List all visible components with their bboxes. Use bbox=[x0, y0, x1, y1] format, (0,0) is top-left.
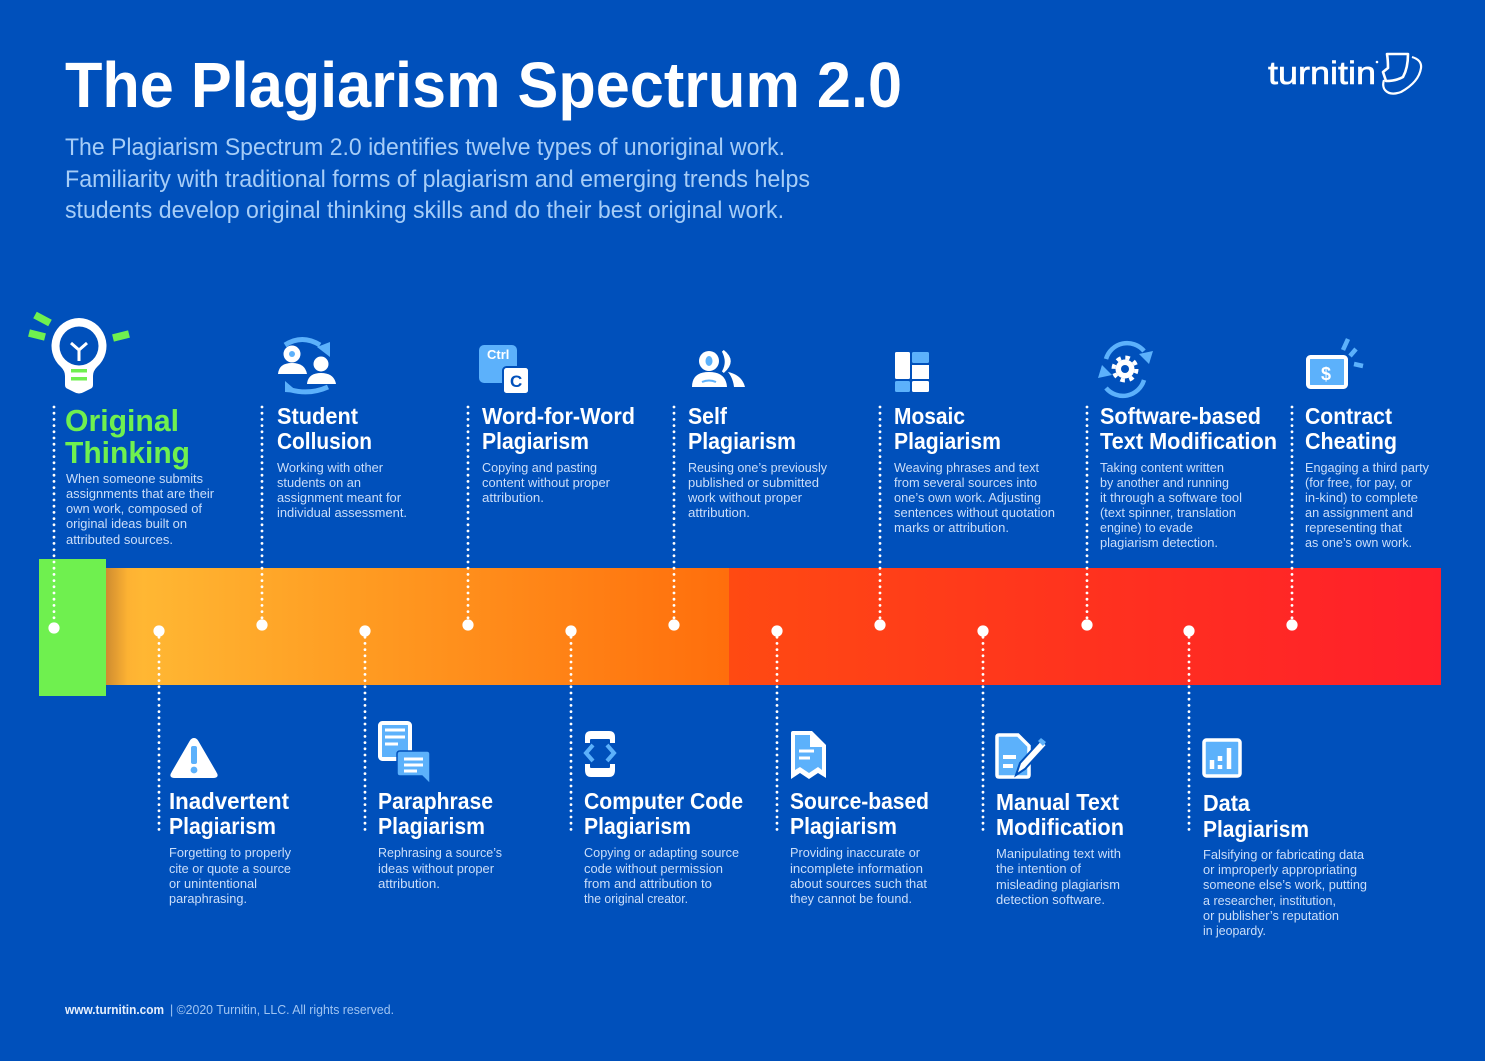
description: work without proper bbox=[687, 490, 803, 505]
connector bbox=[771, 625, 783, 835]
description: or improperly appropriating bbox=[1203, 862, 1357, 877]
description bbox=[790, 845, 927, 906]
panel: manual text modification bbox=[977, 625, 1124, 907]
panel: student collusion bbox=[256, 340, 407, 631]
heading: Plagiarism bbox=[1203, 816, 1309, 842]
description: an assignment and bbox=[1305, 505, 1413, 520]
description bbox=[894, 460, 1055, 535]
description: cite or quote a source bbox=[169, 861, 291, 876]
description bbox=[687, 460, 828, 520]
description: sentences without quotation bbox=[894, 505, 1055, 520]
description: incomplete information bbox=[790, 861, 923, 876]
description: Copying and pasting bbox=[482, 460, 597, 475]
icon: dollar tablet bbox=[1308, 339, 1363, 387]
description: Taking content written bbox=[1100, 460, 1224, 475]
description bbox=[378, 845, 502, 891]
heading: Inadvertent bbox=[169, 788, 289, 814]
icon: ctrl c keys bbox=[479, 345, 529, 394]
heading bbox=[584, 788, 743, 839]
panel: data plagiarism bbox=[1183, 625, 1367, 938]
description: misleading plagiarism bbox=[996, 877, 1120, 892]
description: they cannot be found. bbox=[790, 891, 912, 906]
description: the original creator. bbox=[584, 891, 688, 906]
heading: Data bbox=[1203, 790, 1250, 816]
description: engine) to evade bbox=[1100, 520, 1193, 535]
panel: computer code plagiarism bbox=[565, 625, 743, 906]
description: attribution. bbox=[688, 505, 750, 520]
description: individual assessment. bbox=[277, 505, 407, 520]
heading bbox=[996, 789, 1124, 840]
description: own work, composed of bbox=[66, 501, 202, 516]
description: Engaging a third party bbox=[1305, 460, 1430, 475]
connector bbox=[668, 407, 680, 631]
logo: turnitin bbox=[1268, 54, 1421, 94]
icon: receipt document bbox=[791, 731, 826, 779]
description: the intention of bbox=[996, 861, 1081, 876]
icon: dollar tablet: $ bbox=[1321, 364, 1331, 384]
footer bbox=[64, 1003, 394, 1017]
connector bbox=[1286, 407, 1298, 631]
heading: Computer Code bbox=[584, 788, 743, 814]
heading: Cheating bbox=[1305, 428, 1397, 454]
panel: inadvertent plagiarism bbox=[153, 625, 292, 906]
heading: Modification bbox=[996, 814, 1124, 840]
icon: gear with arrows bbox=[1098, 343, 1153, 396]
description: from and attribution to bbox=[584, 876, 712, 891]
panel: software-based text modification bbox=[1081, 343, 1277, 631]
description: or unintentional bbox=[169, 876, 257, 891]
panel: source-based plagiarism bbox=[771, 625, 929, 906]
description: (text spinner, translation bbox=[1100, 505, 1236, 520]
description: published or submitted bbox=[688, 475, 819, 490]
heading bbox=[894, 403, 1001, 454]
heading: Plagiarism bbox=[688, 428, 796, 454]
heading: Manual Text bbox=[996, 789, 1119, 815]
icon: light bulb bbox=[29, 315, 129, 394]
description: Forgetting to properly bbox=[169, 845, 292, 860]
description: plagiarism detection. bbox=[1100, 535, 1218, 550]
heading bbox=[790, 788, 929, 839]
connector bbox=[48, 407, 60, 634]
description bbox=[66, 471, 215, 547]
description: marks or attribution. bbox=[894, 520, 1009, 535]
heading bbox=[1203, 790, 1309, 842]
heading: Source-based bbox=[790, 788, 929, 814]
description: about sources such that bbox=[790, 876, 927, 891]
heading bbox=[169, 788, 289, 839]
description bbox=[1305, 460, 1430, 550]
description: Falsifying or fabricating data bbox=[1203, 847, 1365, 862]
heading bbox=[1100, 403, 1277, 454]
connector bbox=[359, 625, 371, 835]
heading: Plagiarism bbox=[894, 428, 1001, 454]
footer: | ©2020 Turnitin, LLC. All rights reserved. bbox=[170, 1003, 394, 1017]
connector bbox=[1081, 407, 1093, 631]
heading bbox=[277, 403, 372, 454]
description bbox=[169, 845, 292, 906]
description: Providing inaccurate or bbox=[790, 845, 921, 860]
heading bbox=[688, 403, 796, 454]
description: from several sources into bbox=[894, 475, 1037, 490]
heading: Original bbox=[65, 403, 179, 438]
heading: Student bbox=[277, 403, 358, 429]
connector bbox=[977, 625, 989, 835]
panel: word-for-word plagiarism bbox=[462, 345, 635, 631]
description bbox=[1203, 847, 1367, 938]
icon: warning triangle bbox=[171, 739, 217, 777]
description: assignment meant for bbox=[277, 490, 402, 505]
description: as one’s own work. bbox=[1305, 535, 1412, 550]
icon: document and pencil bbox=[997, 735, 1047, 777]
logo: turnitin: turnitin bbox=[1268, 55, 1376, 91]
heading bbox=[65, 403, 190, 470]
intro text: The Plagiarism Spectrum 2.0 identifies twelve types of unoriginal work. bbox=[65, 134, 785, 161]
panel: paraphrase plagiarism bbox=[359, 625, 502, 891]
title: The Plagiarism Spectrum 2.0 bbox=[65, 49, 902, 121]
intro text bbox=[65, 134, 810, 224]
icon: document and speech bubble bbox=[380, 723, 430, 784]
heading: Plagiarism bbox=[378, 813, 485, 839]
heading: Plagiarism bbox=[169, 813, 276, 839]
description: detection software. bbox=[996, 892, 1105, 907]
description: attribution. bbox=[378, 876, 440, 891]
icon: two students with arrows bbox=[278, 340, 336, 393]
connector bbox=[1183, 625, 1195, 835]
heading: Text Modification bbox=[1100, 428, 1277, 454]
panel: mosaic plagiarism bbox=[874, 352, 1055, 631]
description: assignments that are their bbox=[66, 486, 215, 501]
heading: Contract bbox=[1305, 403, 1392, 429]
description: representing that bbox=[1305, 520, 1402, 535]
description: Copying or adapting source bbox=[584, 845, 739, 860]
description: one’s own work. Adjusting bbox=[894, 490, 1041, 505]
heading: Plagiarism bbox=[584, 813, 691, 839]
panel: self plagiarism bbox=[668, 351, 828, 631]
icon: bar chart bbox=[1204, 740, 1240, 776]
intro text: students develop original thinking skills and do their best original work. bbox=[65, 197, 784, 224]
icon: mosaic tiles bbox=[895, 352, 929, 392]
description: attribution. bbox=[482, 490, 544, 505]
description: Weaving phrases and text bbox=[894, 460, 1039, 475]
description: students on an bbox=[277, 475, 361, 490]
description: it through a software tool bbox=[1100, 490, 1242, 505]
description: When someone submits bbox=[66, 471, 203, 486]
connector bbox=[462, 407, 474, 631]
heading: Self bbox=[688, 403, 727, 429]
description bbox=[584, 845, 739, 906]
spectrum bar bbox=[106, 568, 1441, 685]
green original thinking block bbox=[39, 559, 106, 696]
description: or publisher’s reputation bbox=[1203, 908, 1339, 923]
description: a researcher, institution, bbox=[1203, 893, 1336, 908]
heading: Paraphrase bbox=[378, 788, 493, 814]
heading bbox=[482, 403, 635, 454]
heading: Software-based bbox=[1100, 403, 1261, 429]
heading bbox=[1305, 403, 1397, 454]
description: Reusing one’s previously bbox=[688, 460, 828, 475]
description: Manipulating text with bbox=[996, 846, 1121, 861]
description bbox=[277, 460, 407, 520]
description: ideas without proper bbox=[378, 861, 495, 876]
description bbox=[1100, 460, 1242, 550]
description: (for free, for pay, or bbox=[1305, 475, 1413, 490]
heading bbox=[378, 788, 493, 839]
connector bbox=[874, 407, 886, 631]
description: Working with other bbox=[277, 460, 384, 475]
description: someone else’s work, putting bbox=[1203, 877, 1367, 892]
description: paraphrasing. bbox=[169, 891, 247, 906]
description: in-kind) to complete bbox=[1305, 490, 1418, 505]
heading: Word-for-Word bbox=[482, 403, 635, 429]
icon: ctrl c keys: C bbox=[510, 372, 522, 391]
panel: contract cheating bbox=[1286, 339, 1430, 631]
icon: person with shadow bbox=[692, 351, 745, 387]
connector bbox=[565, 625, 577, 835]
intro text: Familiarity with traditional forms of plagiarism and emerging trends helps bbox=[65, 166, 810, 193]
heading: Thinking bbox=[65, 435, 190, 470]
heading: Collusion bbox=[277, 428, 372, 454]
description: Rephrasing a source’s bbox=[378, 845, 502, 860]
connector bbox=[256, 407, 268, 631]
description: original ideas built on bbox=[66, 516, 187, 531]
heading: Mosaic bbox=[894, 403, 965, 429]
icon: ctrl c keys: Ctrl bbox=[487, 347, 509, 362]
icon: code phone bbox=[585, 731, 615, 777]
description bbox=[482, 460, 611, 505]
description bbox=[996, 846, 1121, 907]
description: in jeopardy. bbox=[1203, 923, 1266, 938]
footer: www.turnitin.com bbox=[64, 1003, 164, 1017]
connector bbox=[153, 625, 165, 835]
description: code without permission bbox=[584, 861, 723, 876]
description: by another and running bbox=[1100, 475, 1229, 490]
heading: Plagiarism bbox=[790, 813, 897, 839]
heading: Plagiarism bbox=[482, 428, 589, 454]
panel: original thinking bbox=[29, 315, 215, 634]
description: attributed sources. bbox=[66, 532, 173, 547]
description: content without proper bbox=[482, 475, 611, 490]
